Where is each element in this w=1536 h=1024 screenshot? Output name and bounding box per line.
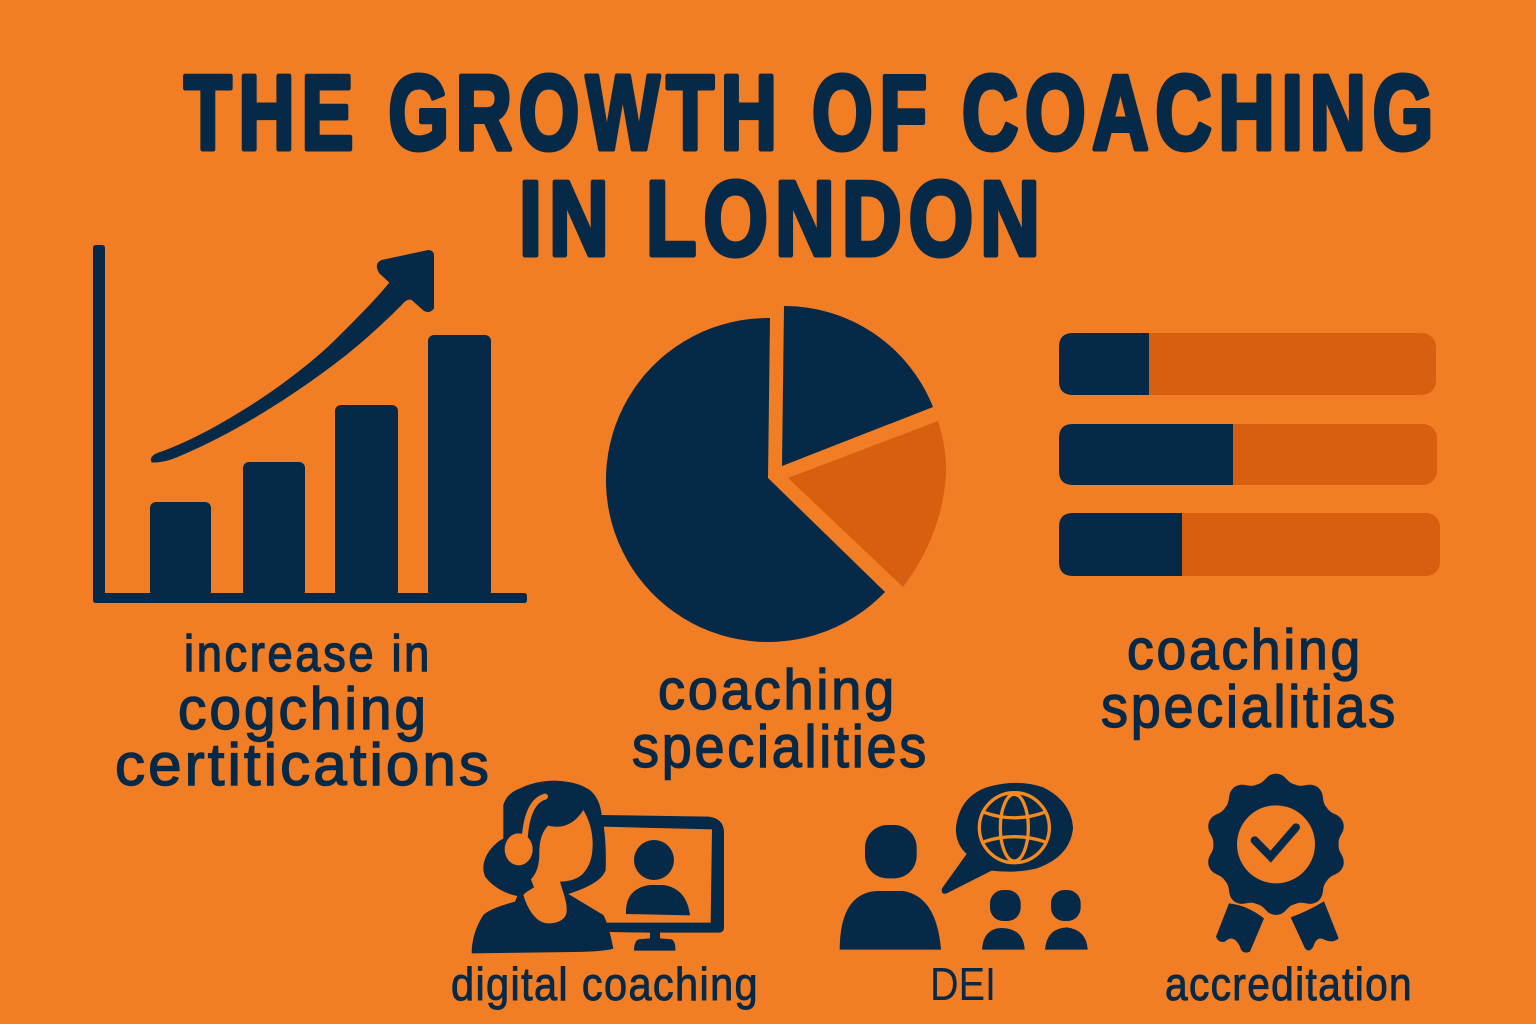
panel: progress bars <box>1059 333 1440 740</box>
bar chart with axes <box>93 245 527 603</box>
panel: certifications growth <box>93 245 527 798</box>
pie chart <box>606 306 946 642</box>
panel: pie chart <box>606 306 946 780</box>
label: accreditation: accreditation <box>1165 958 1413 1010</box>
panel: digital coaching <box>451 781 759 1010</box>
label: certifications: increase in <box>184 625 432 682</box>
label: progress bars: specialitias <box>1101 674 1398 740</box>
panel: DEI <box>840 783 1088 1010</box>
globe <box>979 793 1049 863</box>
panel: accreditation <box>1165 774 1413 1010</box>
label: DEI: DEI <box>930 958 996 1010</box>
label: pie chart <box>632 658 929 780</box>
label: progress bars: coaching <box>1127 618 1363 682</box>
icon: people with globe speech bubble <box>840 783 1088 950</box>
label: pie chart: coaching <box>658 658 897 722</box>
label: progress bars <box>1101 618 1398 740</box>
label: pie chart: specialities <box>632 714 929 780</box>
label: certifications: cogching <box>178 676 429 742</box>
icon: coach with headset at monitor <box>472 781 724 953</box>
label: certifications: certitications <box>115 732 492 798</box>
label: digital coaching: digital coaching <box>451 958 759 1010</box>
label: certifications <box>115 625 492 798</box>
title <box>184 54 1440 278</box>
title: IN LONDON <box>519 160 1047 278</box>
icon: award rosette <box>1208 774 1344 953</box>
progress bars <box>1059 333 1440 576</box>
growth arrow <box>151 250 434 462</box>
